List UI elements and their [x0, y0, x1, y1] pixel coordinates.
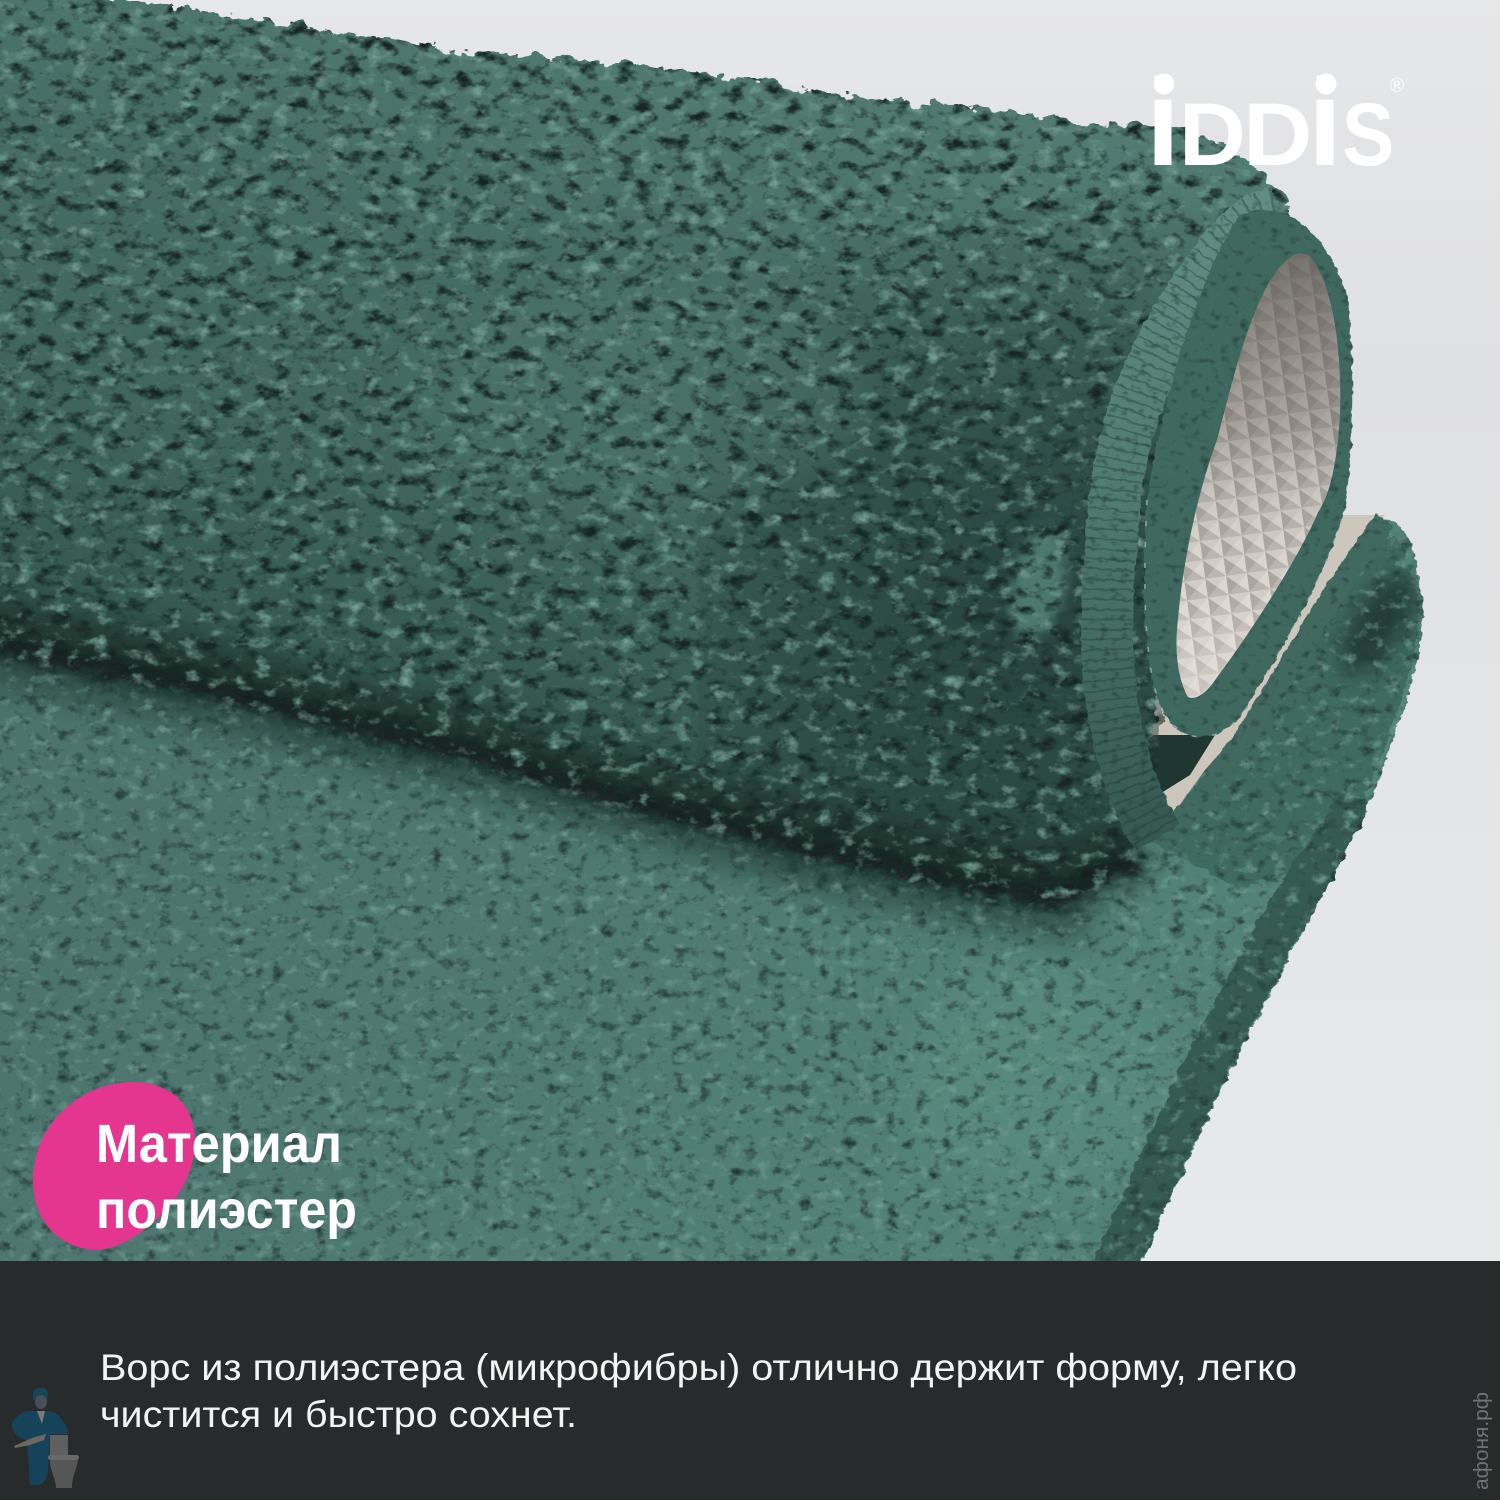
mat backing visible behind the flap: [1148, 515, 1385, 825]
icon: plumber with toilet watermark: [12, 1388, 79, 1488]
brand logo: IDDIS: D: [1243, 84, 1312, 184]
outer rib-stitched binding of the roll end: [1107, 212, 1275, 838]
lower unrolled mat with flap: [0, 518, 1429, 1300]
inner dark binding ring around the backing: [1144, 209, 1352, 737]
heading: material: полиэстер: [96, 1180, 357, 1240]
brand logo: IDDIS: D: [1179, 86, 1246, 185]
brand logo: IDDIS: S: [1342, 84, 1394, 184]
side watermark: afonya.rf: афоня.рф: [1471, 1392, 1493, 1490]
caption text: Ворс из полиэстера (микрофибры) отлично держит форму, легко: [100, 1346, 1297, 1388]
main rolled pile: [0, 0, 1290, 900]
flap binding edge: [1160, 520, 1385, 846]
heading: material: Материал: [96, 1114, 342, 1174]
brand logo: IDDIS: i: [1146, 55, 1180, 192]
brand logo: IDDIS: [1146, 55, 1405, 192]
stitched seam line: [1145, 500, 1345, 737]
caption text: [100, 1346, 1297, 1435]
dark caption panel: [0, 1261, 1500, 1500]
shadow under the curled binding: [1145, 735, 1215, 800]
pink accent blob: [33, 1082, 195, 1250]
brand logo: IDDIS: ®: [1390, 75, 1405, 97]
brand logo: IDDIS: i: [1308, 55, 1342, 192]
waffle backing of the mat: [1176, 254, 1340, 698]
caption text: чистится и быстро сохнет.: [100, 1393, 577, 1435]
heading: material: [96, 1114, 357, 1240]
